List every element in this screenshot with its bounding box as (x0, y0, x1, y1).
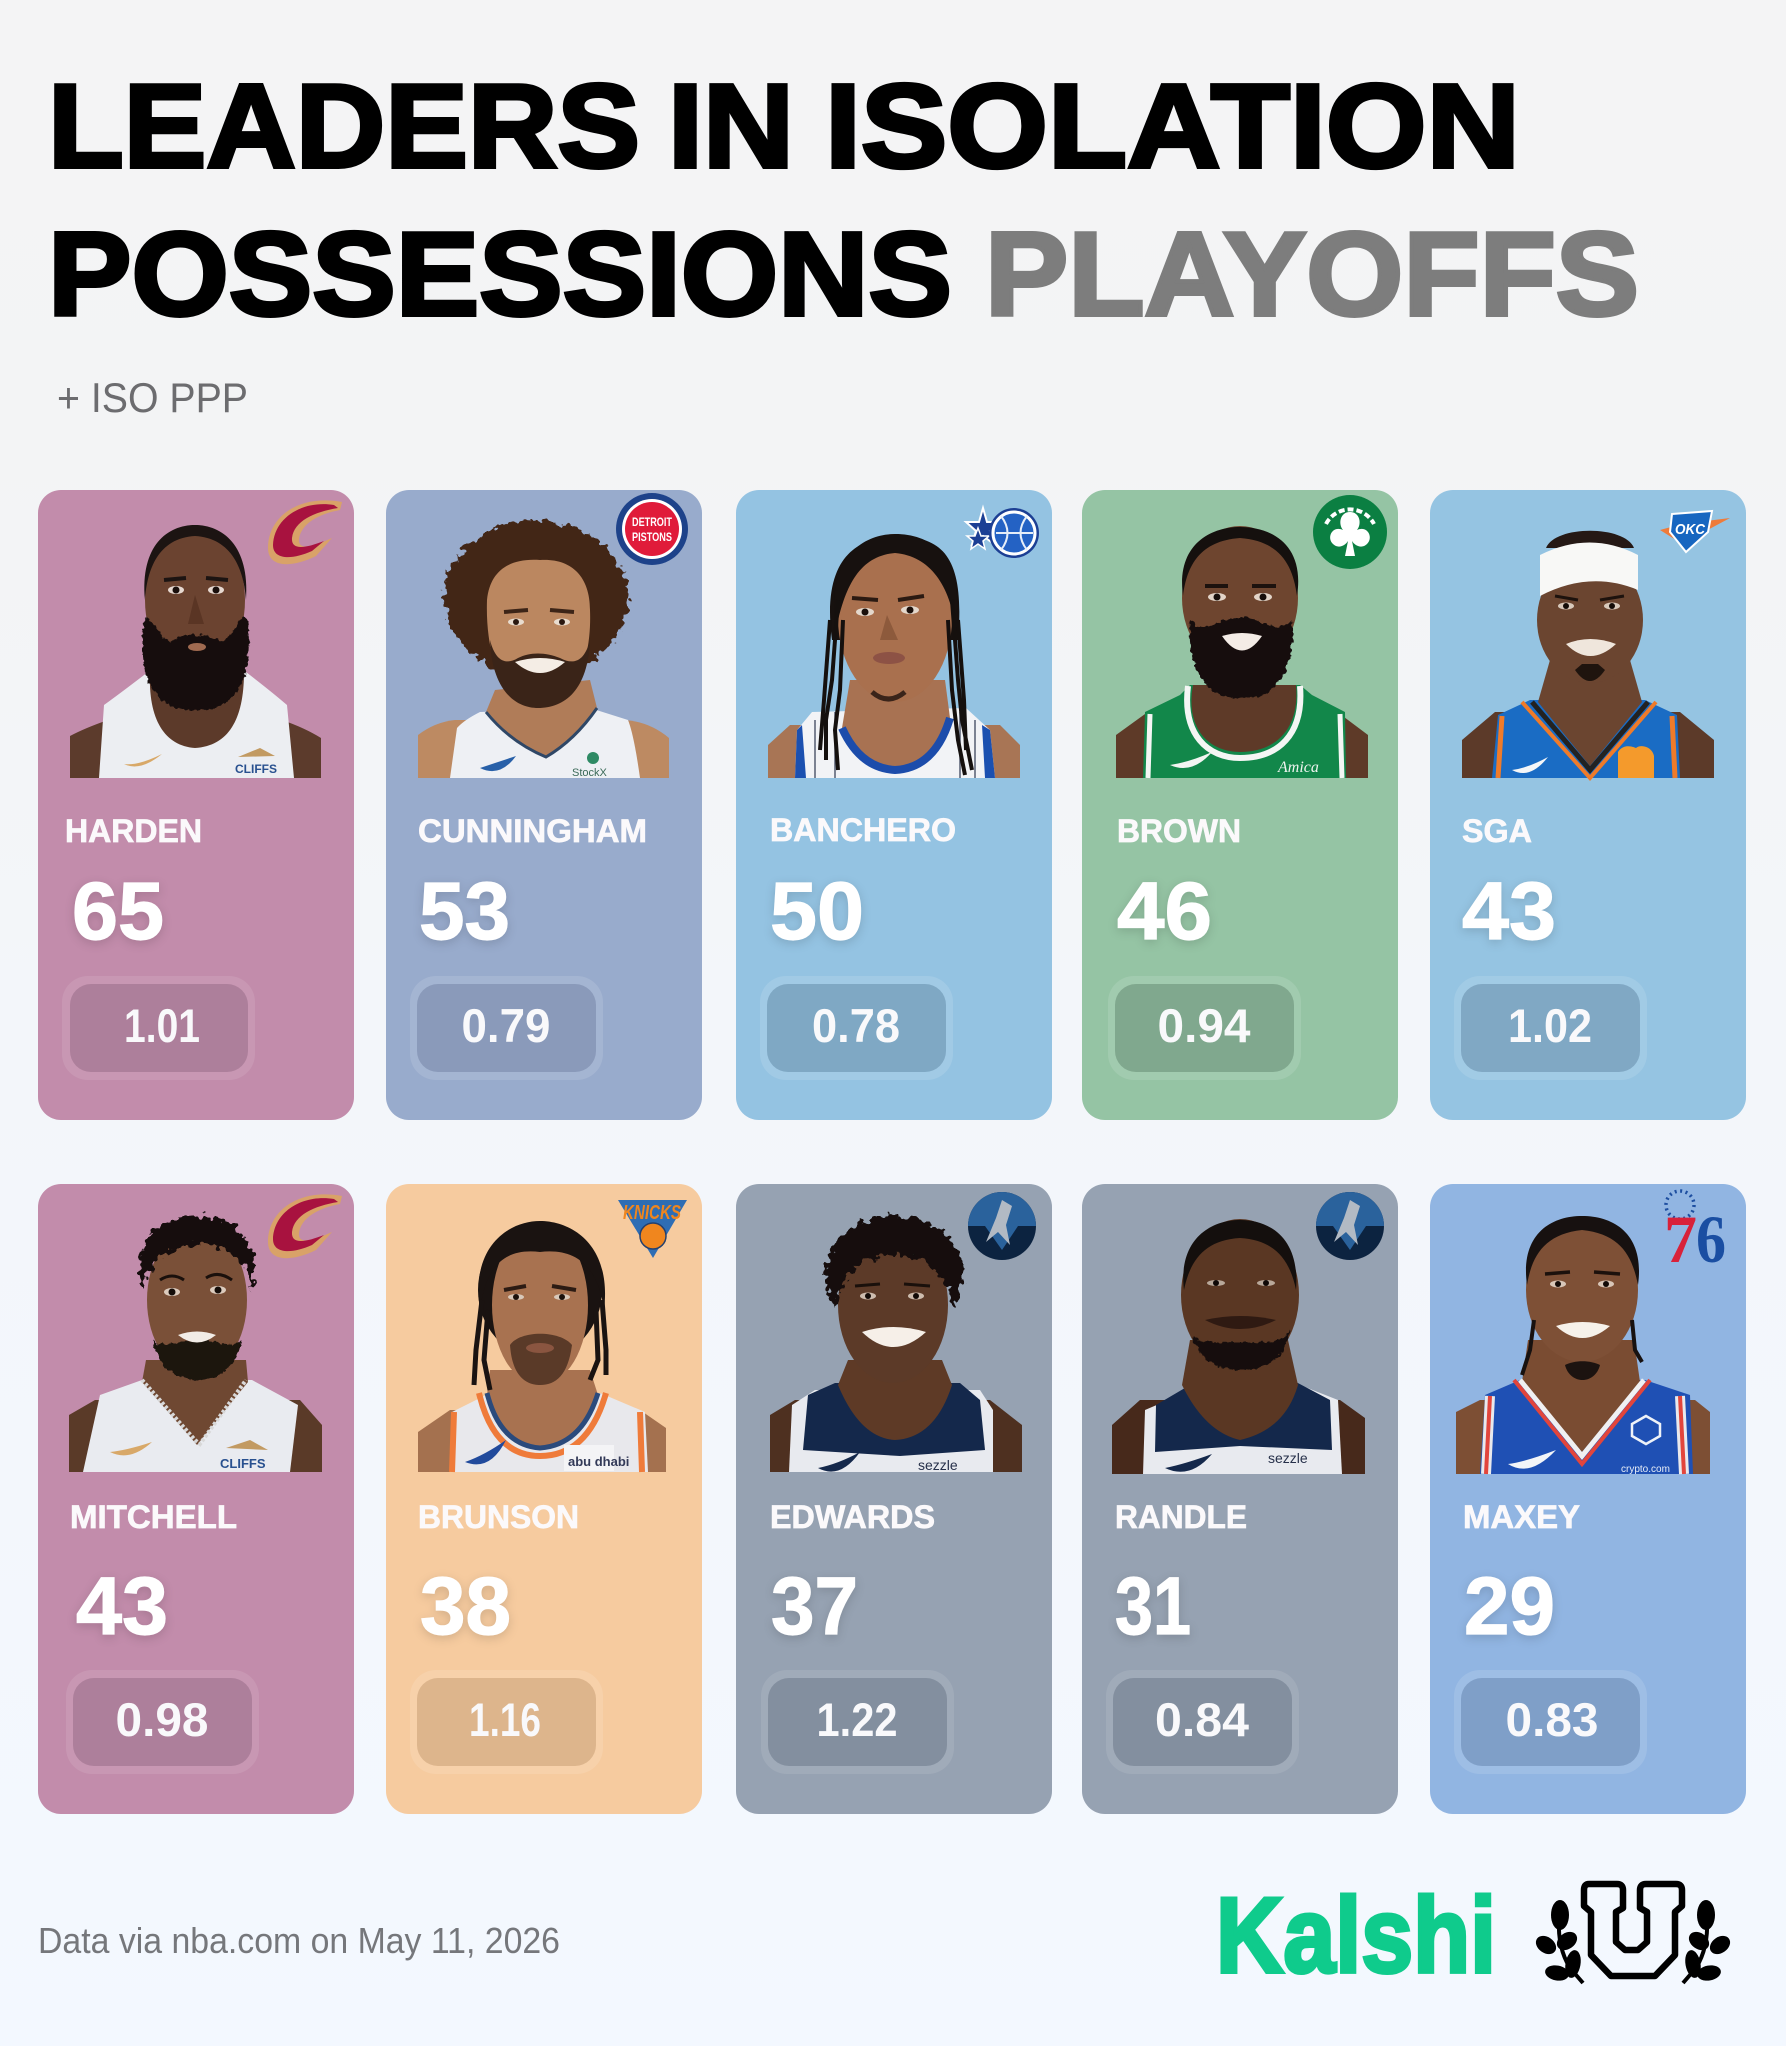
portrait: Mitchell: CLIFFS (220, 1456, 266, 1471)
badge: ISO PPP: 1.01 (124, 999, 200, 1052)
badge: ISO PPP: 1.16 (469, 1693, 541, 1746)
icon: Magic logo (966, 508, 1039, 558)
portrait: Harden (70, 525, 321, 778)
value: possessions: 53 (419, 866, 510, 957)
badge: ISO PPP (761, 1670, 954, 1774)
hair (139, 1216, 254, 1290)
player name: EDWARDS (770, 1499, 935, 1535)
icon: Knicks logo (618, 1200, 687, 1258)
portrait: Maxey: crypto.com (1621, 1464, 1670, 1475)
portrait: SGA (1462, 531, 1714, 778)
player name: MAXEY (1463, 1499, 1580, 1535)
badge: ISO PPP (1454, 976, 1647, 1080)
value: possessions: 38 (420, 1561, 511, 1652)
card: Maxey (1430, 1184, 1746, 1814)
title: PLAYOFFS (985, 208, 1639, 341)
beard (1190, 618, 1293, 698)
icon: Cavaliers logo (268, 1194, 342, 1258)
value: possessions: 65 (72, 866, 164, 957)
badge: ISO PPP (66, 1670, 259, 1774)
title: IN (668, 60, 794, 193)
badge: ISO PPP (1454, 1670, 1647, 1774)
value: possessions: 29 (1464, 1561, 1555, 1652)
player name: BROWN (1117, 813, 1241, 849)
title: LEADERS (48, 60, 640, 193)
card: Edwards (736, 1184, 1052, 1814)
title: POSSESSIONS (48, 208, 952, 341)
portrait: Edwards: sezzle (918, 1457, 958, 1473)
player name: RANDLE (1115, 1499, 1247, 1535)
icon: 76ers logo: 6 (1696, 1201, 1726, 1277)
badge: ISO PPP (1108, 976, 1301, 1080)
badge: ISO PPP (62, 976, 255, 1080)
icon: Cavaliers logo (268, 500, 342, 564)
subtitle: + ISO PPP (57, 374, 248, 421)
value: possessions: 31 (1115, 1561, 1191, 1652)
portrait: Banchero (768, 534, 1020, 778)
player name: BRUNSON (418, 1499, 579, 1535)
icon: Timberwolves logo (1316, 1192, 1384, 1260)
card: Brown (1082, 490, 1398, 1120)
badge: ISO PPP (410, 1670, 603, 1774)
badge: ISO PPP: 0.94 (1158, 999, 1250, 1052)
icon: Thunder logo: OKC (1675, 521, 1706, 538)
portrait: Brown: Amica (1277, 759, 1319, 776)
portrait: Edwards (770, 1216, 1022, 1473)
title (48, 60, 1639, 341)
logo: Kalshi: Kalshi (1216, 1875, 1496, 1995)
badge: ISO PPP: 1.22 (816, 1693, 898, 1746)
portrait: Maxey (1456, 1216, 1710, 1475)
badge: ISO PPP (410, 976, 603, 1080)
icon: Pistons logo (616, 493, 688, 565)
card: SGA (1430, 490, 1746, 1120)
portrait: Mitchell (69, 1216, 322, 1472)
hair (826, 1216, 963, 1310)
icon: Knicks logo: KNICKS (623, 1202, 681, 1224)
portrait: Brown (1116, 526, 1368, 778)
player name: MITCHELL (70, 1499, 237, 1535)
icon: Pistons logo: DETROIT (632, 515, 673, 529)
beard (1192, 1330, 1290, 1370)
badge: ISO PPP: 0.84 (1155, 1693, 1249, 1746)
card: Mitchell (38, 1184, 354, 1814)
player name: HARDEN (65, 813, 202, 849)
portrait: Randle: sezzle (1268, 1450, 1308, 1466)
player name: SGA (1462, 813, 1532, 849)
portrait: Brunson: abu dhabi (568, 1454, 629, 1469)
title: ISOLATION (825, 60, 1520, 193)
badge: ISO PPP (1106, 1670, 1299, 1774)
value: possessions: 37 (771, 1561, 858, 1652)
hair (444, 520, 628, 676)
source note: Data via nba.com on May 11, 2026 (38, 1920, 560, 1961)
portrait: Cunningham (418, 520, 669, 779)
badge: ISO PPP (760, 976, 953, 1080)
card: Cunningham (386, 490, 702, 1120)
badge: ISO PPP: 0.79 (462, 999, 550, 1052)
card: Banchero (736, 490, 1052, 1120)
portrait: Harden: CLIFFS (235, 762, 277, 776)
icon: Thunder logo (1660, 511, 1730, 552)
beard (142, 617, 249, 710)
value: possessions: 43 (1462, 866, 1556, 957)
player name: CUNNINGHAM (418, 813, 647, 849)
icon: 76ers logo: 7 (1664, 1201, 1697, 1277)
badge: ISO PPP: 0.83 (1506, 1693, 1598, 1746)
badge: ISO PPP: 0.78 (812, 999, 900, 1052)
value: possessions: 50 (770, 866, 864, 957)
portrait: Cunningham: StockX (572, 767, 608, 779)
portrait: Brunson (418, 1221, 666, 1472)
icon: Pistons logo: PISTONS (632, 530, 672, 544)
card: Randle (1082, 1184, 1398, 1814)
card: Harden (38, 490, 354, 1120)
logo: U with laurels (1532, 1884, 1734, 1983)
beard (152, 1340, 242, 1380)
portrait: Randle (1112, 1219, 1365, 1474)
card: Brunson (386, 1184, 702, 1814)
value: possessions: 43 (76, 1561, 168, 1652)
badge: ISO PPP: 0.98 (116, 1693, 208, 1746)
player name: BANCHERO (770, 812, 956, 848)
icon: Celtics logo (1313, 495, 1387, 569)
icon: 76ers logo (1664, 1191, 1726, 1277)
value: possessions: 46 (1117, 866, 1212, 957)
icon: Timberwolves logo (968, 1192, 1036, 1260)
badge: ISO PPP: 1.02 (1508, 999, 1592, 1052)
